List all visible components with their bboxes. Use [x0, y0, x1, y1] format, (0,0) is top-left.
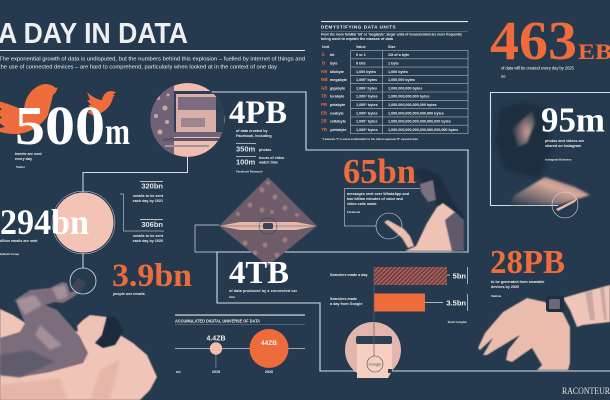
table: demystifying data units: EB [321, 110, 327, 115]
table: demystifying data units: Unit [322, 45, 330, 49]
stat: 4PB [229, 95, 287, 174]
table: demystifying data units: Value [356, 45, 366, 49]
panel: whatsapp: 65bn [343, 152, 416, 191]
table: demystifying data units: 8 bits [356, 62, 366, 66]
intro text: The exponential growth of data is undisputed, but the numbers behind this explosion – fuelled by internet of things and [0, 56, 305, 62]
emails bracket: 320bn [141, 182, 163, 190]
table: demystifying data units: Size [388, 45, 395, 49]
table: demystifying data units: kilobyte [330, 70, 344, 74]
panel: instagram: 95m [541, 100, 605, 140]
chart: accumulated digital universe [175, 314, 305, 374]
panel: instagram: photos and videos are [545, 139, 584, 143]
chart: google searches: Searches made [330, 297, 357, 301]
woman with phone [384, 168, 464, 251]
table: demystifying data units: DEMYSTIFYING DATA UNITS [321, 24, 396, 30]
table: demystifying data units: 1,000,000,000,000 bytes [388, 95, 429, 99]
table: demystifying data units: 1,000⁴ bytes [356, 95, 378, 99]
ring: phone in hand [552, 192, 578, 218]
emails bracket: each day by 2021 [133, 199, 163, 203]
table: demystifying data units: From the more familiar 'bit' or 'megabyte', larger units of measurement are more frequently [321, 32, 463, 36]
table: demystifying data units: 1,000⁸ bytes [356, 128, 378, 132]
table: demystifying data units: petabyte [330, 103, 345, 107]
circle: emails [52, 191, 115, 254]
photo: car from above [219, 177, 317, 269]
emails bracket: 306bn [141, 220, 163, 229]
stat: 28PB: devices by 2020 [491, 285, 519, 289]
table: demystifying data units: 1,000 bytes [388, 70, 408, 74]
circle: phone backdrop [345, 322, 401, 378]
stat: 500m: every day [15, 157, 33, 161]
stat: 463EB [490, 10, 610, 78]
table: demystifying data units: exabyte [330, 111, 344, 115]
table: demystifying data units: being used to explain the masses of data [321, 37, 394, 41]
table: demystifying data units: 1,000² bytes [356, 78, 377, 82]
table: demystifying data units: 1,000,000,000 bytes [388, 86, 422, 90]
panel: whatsapp: two billion minutes of voice and [347, 197, 404, 201]
table: demystifying data units: KB [321, 69, 327, 74]
ring: phone hand [376, 213, 402, 239]
table: demystifying data units: terabyte [330, 95, 344, 99]
chart: google searches [330, 267, 468, 324]
stat: 463EB: of data will be created every day by 2025 [501, 66, 575, 70]
stat: 28PB: Statista [491, 294, 502, 298]
panel: whatsapp: video calls made [347, 202, 377, 206]
table: demystifying data units: YB [321, 127, 327, 132]
illustration: hand with watch [478, 285, 610, 370]
chart: accumulated digital universe: 2020 [265, 370, 273, 374]
chart: google searches: Smart Insights [448, 320, 467, 324]
table: demystifying data units: *A lowercase "b" is used as an abbreviation for bits, while an uppercase "B" represents bytes [322, 137, 418, 141]
stat: 500m: 500 [15, 95, 105, 156]
table: demystifying data units: 1,000,000,000,000,000,000,000 bytes [388, 120, 451, 124]
table: demystifying data units: ZB [321, 119, 327, 124]
stat: 500m: Twitter [16, 165, 26, 169]
stat: 28PB [490, 244, 565, 298]
phone with Google: Google [369, 362, 382, 366]
table: demystifying data units: gigabyte [330, 86, 345, 90]
stat: 4PB: 350m [236, 144, 256, 154]
table: demystifying data units: 1,000⁷ bytes [356, 120, 377, 124]
stat: 28PB: to be generated from wearable [491, 280, 544, 284]
title: A DAY IN DATA [0, 18, 188, 50]
table: demystifying data units: 1,000 bytes [356, 70, 376, 74]
chart: accumulated digital universe: 2019 [212, 370, 220, 374]
table: demystifying data units: B [322, 60, 325, 66]
stat: 500m: m [105, 111, 130, 153]
table: demystifying data units: 1/8 of a byte [388, 53, 409, 57]
table: demystifying data units: PB [321, 102, 327, 107]
chart: google searches: 5bn [453, 272, 466, 280]
stat: 4TB box: Intel [229, 295, 235, 299]
icon: big twitter bird [0, 84, 58, 134]
stat: 4PB: Facebook, including [236, 134, 272, 138]
stat: 3.9bn: people use emails [113, 292, 145, 296]
stat: 4PB: photos [259, 148, 271, 152]
stat: 4PB: 100m [236, 158, 256, 166]
stat: 500m [15, 95, 130, 169]
table: demystifying data units: 1,000,000 bytes [388, 78, 415, 82]
table: demystifying data units: byte [330, 62, 338, 66]
stat: 463EB: EB [578, 39, 610, 64]
chart: google searches: a day from Google [330, 302, 362, 306]
stat: 3.9bn: 3.9bn [112, 258, 192, 294]
stat: 4PB: Facebook Research [236, 170, 263, 174]
title rule [0, 50, 305, 51]
chart: google searches: 3.5bn [446, 298, 466, 308]
table: demystifying data units: 0 or 1 [356, 53, 366, 57]
icon: small twitter bird [87, 91, 116, 115]
stat: 294bn: 294bn [0, 202, 89, 242]
table: demystifying data units: GB [321, 85, 327, 90]
stat: 4TB box: 4TB [229, 254, 289, 290]
phone with Google [356, 336, 392, 378]
table: demystifying data units: megabyte [330, 78, 347, 82]
stat: 500m: tweets are sent [15, 152, 42, 156]
table: demystifying data units: 1,000³ bytes [356, 86, 377, 90]
table: demystifying data units: zettabyte [330, 120, 346, 124]
intro text: the use of connected devices – are hard to comprehend, particularly when looked at in the context of one day [0, 64, 277, 70]
chart: accumulated digital universe: ACCUMULATED DIGITAL UNIVERSE OF DATA [175, 318, 261, 324]
stat: 463EB: IDC [501, 74, 506, 78]
table: demystifying data units: 1,000,000,000,000,000,000,000,000 bytes [388, 128, 458, 132]
emails bracket [120, 181, 164, 243]
panel: instagram: shared on Instagram [545, 144, 582, 148]
chart: accumulated digital universe: IDC [176, 370, 181, 374]
table: demystifying data units: MB [321, 77, 328, 82]
table: demystifying data units: 1,000,000,000,000,000 bytes [388, 103, 437, 107]
ring: phone [70, 268, 96, 294]
table: demystifying data units [321, 21, 468, 141]
table: demystifying data units: 1 byte [388, 62, 399, 66]
table: demystifying data units: TB [321, 94, 327, 99]
stat: 4PB: of data created by [236, 129, 269, 133]
table: demystifying data units: 1,000⁵ bytes [356, 103, 378, 107]
woman with phone [495, 102, 590, 204]
table: demystifying data units: yottabyte [330, 128, 346, 132]
connector lines [83, 92, 610, 371]
chart: accumulated digital universe: 4.4ZB [206, 336, 226, 342]
emails bracket: each day by 2020 [133, 239, 163, 243]
stat: 463EB: 463 [490, 10, 577, 71]
chart: accumulated digital universe: 44ZB [261, 340, 277, 347]
photo: laptop circle [150, 83, 224, 157]
panel: instagram [490, 92, 610, 218]
table: demystifying data units: bit [330, 53, 335, 57]
intro text [0, 56, 305, 70]
chart: google searches: Searches made a day [330, 273, 368, 277]
table: demystifying data units: 1,000⁶ bytes [356, 111, 378, 115]
illustration: man on bed [0, 277, 157, 400]
stat: 4PB: hours of video [259, 156, 285, 160]
panel: whatsapp [343, 152, 464, 251]
table: demystifying data units: b [322, 52, 325, 57]
table: demystifying data units: 1,000,000,000,000,000,000 bytes [388, 111, 444, 115]
stat: 4PB: watch time [258, 160, 278, 164]
emails bracket: emails to be sent [133, 234, 164, 238]
stat: 4PB: 4PB [229, 95, 287, 131]
stat: 4TB box: of data produced by a connected car [229, 289, 298, 293]
panel: instagram: Instagram Business [545, 158, 572, 162]
stat: 294bn: billion emails are sent [0, 239, 38, 243]
emails bracket: emails to be sent [133, 194, 164, 198]
panel: whatsapp: Facebook [347, 210, 361, 214]
stat: 4TB box [229, 254, 298, 299]
panel: whatsapp: messages sent over WhatsApp and [347, 192, 410, 196]
stat: 28PB: 28PB [490, 244, 565, 281]
